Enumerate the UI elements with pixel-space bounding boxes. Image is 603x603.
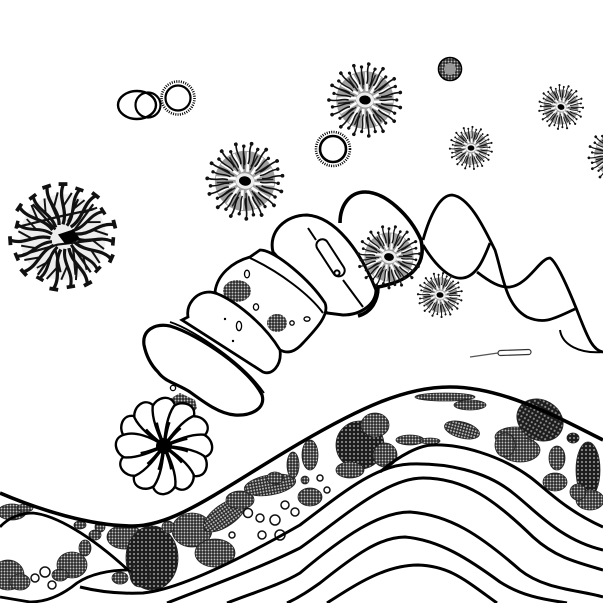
membrane layers bbox=[80, 445, 603, 603]
barrel segment 4 bbox=[272, 215, 376, 315]
double ring top left bbox=[118, 91, 160, 119]
flower rosette bbox=[112, 394, 216, 498]
virus middle bbox=[199, 135, 291, 227]
outer membrane curve bbox=[0, 387, 603, 526]
needle capsule bbox=[470, 349, 531, 357]
virus top right bbox=[531, 77, 591, 136]
textured cell band bbox=[0, 391, 603, 590]
dotted ring bbox=[162, 82, 194, 114]
small textured sphere bbox=[438, 58, 462, 80]
virus large left bbox=[10, 184, 116, 290]
bottom barrel disc bbox=[144, 322, 264, 415]
dotted ring center bbox=[316, 132, 350, 166]
virus small center right bbox=[447, 124, 495, 171]
mottled blob above flower bbox=[163, 393, 197, 417]
virus on capsule bbox=[351, 219, 427, 295]
virus right edge bbox=[587, 126, 603, 183]
ribbon strand bbox=[423, 195, 603, 352]
barrel segment 5 bbox=[340, 192, 422, 316]
inner left sac bbox=[0, 513, 128, 602]
virus below bbox=[414, 269, 466, 321]
barrel segment 2 bbox=[182, 292, 287, 373]
virus top center bbox=[323, 58, 407, 141]
capsule inside segment bbox=[308, 228, 363, 307]
barrel segment 3 bbox=[215, 250, 326, 352]
